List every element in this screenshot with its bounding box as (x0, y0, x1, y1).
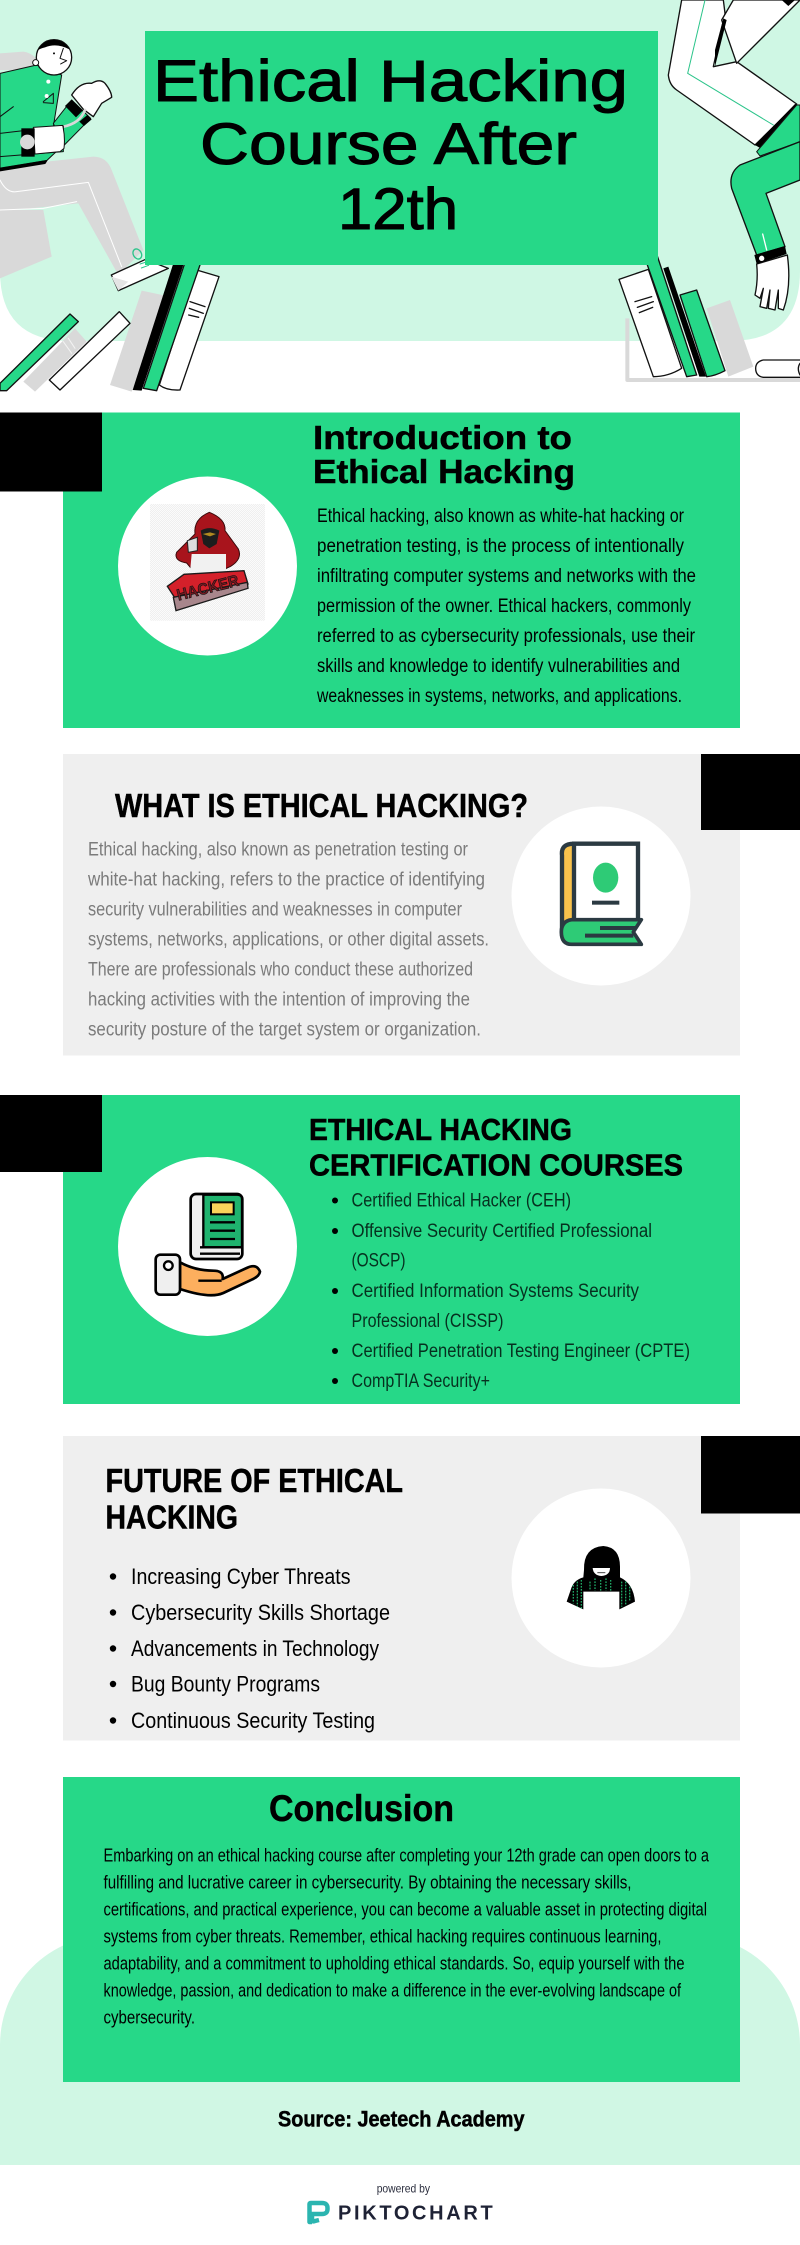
heading: certification courses: ETHICAL HACKING (309, 1112, 572, 1147)
list: certification courses: (OSCP) (352, 1250, 406, 1272)
text block: what is ethical hacking: security posture of the target system or organization. (88, 1020, 481, 1040)
text block: conclusion: systems from cyber threats. Remember, ethical hacking requires continuous learning, (104, 1927, 662, 1947)
text block: what is ethical hacking: white-hat hacking, refers to the practice of identifying (87, 870, 485, 890)
footer: piktochart logo: PIKTOCHART (338, 2202, 493, 2224)
illustration: running person and falling books (0, 40, 219, 392)
text block: what is ethical hacking: systems, networks, applications, or other digital assets. (88, 930, 489, 950)
source line: Source: Jeetech Academy (278, 2107, 525, 2132)
list: certification courses: Certified Penetration Testing Engineer (CPTE) (352, 1341, 690, 1362)
text block: introduction (316, 506, 696, 707)
icon: hooded hacker (567, 1546, 635, 1609)
heading: future of ethical hacking (106, 1462, 403, 1536)
icon: red hacker logo: HACKER (175, 573, 241, 605)
text block: what is ethical hacking: security vulnerabilities and weaknesses in computer (88, 900, 463, 920)
list: future of ethical hacking: Advancements in Technology (131, 1636, 379, 1661)
text block: introduction: weaknesses in systems, networks, and applications. (316, 686, 682, 707)
heading: what is ethical hacking: WHAT IS ETHICAL HACKING? (115, 787, 528, 824)
list: certification courses: Certified Information Systems Security (352, 1281, 639, 1302)
list: certification courses: Certified Ethical Hacker (CEH) (352, 1190, 571, 1212)
heading: future of ethical hacking: HACKING (106, 1498, 238, 1536)
list: future of ethical hacking: Increasing Cyber Threats (131, 1564, 350, 1589)
text block: conclusion (104, 1846, 710, 2028)
list: future of ethical hacking (110, 1564, 390, 1733)
background: top mint shape (0, 0, 800, 341)
footer: piktochart logo: powered by (377, 2182, 430, 2196)
panel: what is ethical hacking (63, 754, 800, 1056)
heading: introduction: Introduction to (313, 419, 572, 456)
panel: certification courses (0, 1095, 740, 1404)
heading: certification courses: CERTIFICATION COURSES (309, 1148, 683, 1182)
text block: conclusion: cybersecurity. (104, 2008, 195, 2028)
text block: what is ethical hacking: There are professionals who conduct these authorized (88, 960, 473, 980)
text block: introduction: penetration testing, is the process of intentionally (317, 536, 684, 557)
text block: what is ethical hacking (87, 840, 489, 1040)
panel: future of ethical hacking (63, 1436, 800, 1740)
list: certification courses (332, 1190, 690, 1392)
list: certification courses: CompTIA Security+ (352, 1371, 490, 1392)
panel: introduction (0, 412, 740, 728)
text block: conclusion: adaptability, and a commitment to upholding ethical standards. So, equip yourself with the (104, 1954, 684, 1974)
list: certification courses: Offensive Security Certified Professional (352, 1221, 652, 1242)
text block: what is ethical hacking: hacking activities with the intention of improving the (88, 990, 470, 1010)
heading: introduction (313, 419, 575, 490)
background: bottom mint shape (0, 1935, 800, 2165)
footer: piktochart logo (310, 2182, 493, 2224)
title block: Ethical Hacking (153, 49, 628, 114)
text block: introduction: Ethical hacking, also known as white-hat hacking or (317, 506, 685, 527)
text block: conclusion: fulfilling and lucrative career in cybersecurity. By obtaining the necessary skills, (104, 1873, 632, 1893)
text block: introduction: permission of the owner. Ethical hackers, commonly (317, 596, 691, 617)
list: future of ethical hacking: Bug Bounty Programs (131, 1672, 320, 1696)
title block: Course After (200, 112, 577, 177)
text block: what is ethical hacking: Ethical hacking, also known as penetration testing or (88, 840, 469, 860)
icon: book (561, 844, 641, 944)
icon: hand holding book (156, 1194, 260, 1295)
panel: conclusion (63, 1777, 740, 2082)
text block: introduction: infiltrating computer systems and networks with the (317, 566, 696, 587)
text block: introduction: referred to as cybersecurity professionals, use their (317, 626, 696, 647)
list: future of ethical hacking: Cybersecurity Skills Shortage (131, 1600, 390, 1625)
icon: red hacker logo (150, 504, 265, 621)
heading: conclusion: Conclusion (269, 1788, 454, 1829)
title block (145, 31, 658, 265)
heading: introduction: Ethical Hacking (313, 453, 575, 490)
list: certification courses: Professional (CISSP) (352, 1311, 504, 1332)
illustration: sitting person and stacked books (619, 0, 800, 380)
text block: introduction: skills and knowledge to identify vulnerabilities and (317, 656, 680, 677)
title block: 12th (338, 177, 458, 242)
heading: future of ethical hacking: FUTURE OF ETHICAL (106, 1462, 403, 1499)
heading: certification courses (309, 1112, 683, 1182)
list: future of ethical hacking: Continuous Security Testing (131, 1708, 375, 1733)
